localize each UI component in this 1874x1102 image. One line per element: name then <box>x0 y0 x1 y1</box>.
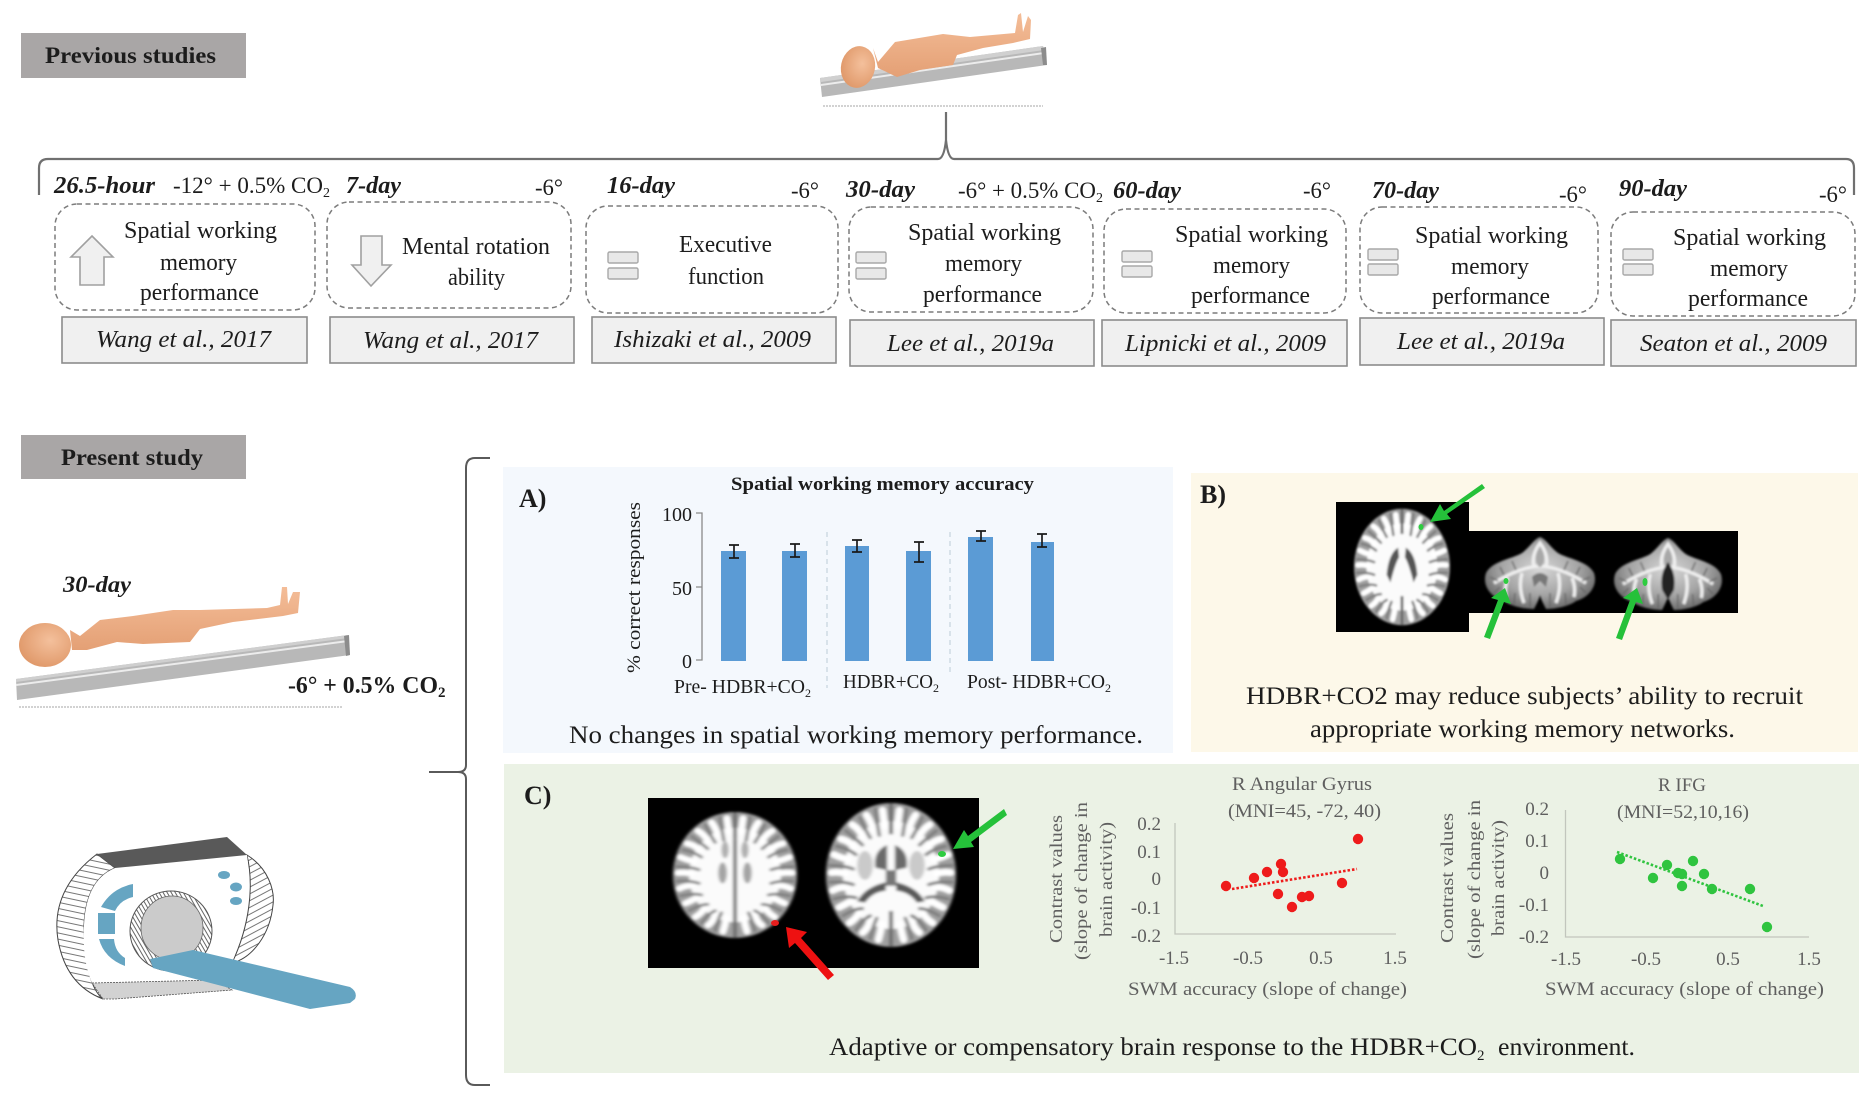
label: tilt and CO2 condition: 2 <box>438 685 446 701</box>
scatter plot: R IFG: 0.1 <box>1525 831 1549 852</box>
study 1: 26.5-hour: 2 <box>323 186 330 201</box>
study 7: 90-day: Spatial working <box>1673 225 1826 251</box>
label: tilt and CO2 condition: -6° + 0.5% CO <box>288 673 438 699</box>
scatter plot: R Angular Gyrus: 0.5 <box>1309 948 1333 969</box>
bar chart: accuracy: Post- HDBR+CO <box>967 671 1105 693</box>
study 5: 60-day: Spatial working <box>1175 222 1328 248</box>
caption: adaptive response: 2 <box>1477 1048 1484 1064</box>
bar chart: accuracy: 50 <box>672 578 692 600</box>
panel A: spatial working memory accuracy: A) <box>519 484 546 513</box>
study 1: 26.5-hour: Spatial working <box>124 218 277 244</box>
bar chart: accuracy: % correct responses <box>624 502 645 673</box>
study 6: 70-day: memory <box>1451 254 1529 280</box>
study 4: 30-day: Lee et al., 2019a <box>886 331 1054 357</box>
study 5: 60-day: memory <box>1213 253 1290 279</box>
arrow: green pointing to second cerebellum cluster <box>1616 588 1643 640</box>
panel B: reduced recruitment of networks: B) <box>1200 480 1226 509</box>
scatter plot: R Angular Gyrus <box>1046 774 1407 1000</box>
bar chart: accuracy: 2 <box>1105 681 1111 695</box>
caption: adaptive response <box>829 1034 1635 1064</box>
scatter plot: R Angular Gyrus: 1.5 <box>1383 948 1407 969</box>
study 6: 70-day: Lee et al., 2019a <box>1396 329 1565 355</box>
study 7: 90-day <box>1611 176 1856 366</box>
scatter plot: R IFG: SWM accuracy (slope of change) <box>1545 979 1824 1000</box>
bracket: previous studies timeline <box>39 112 1854 195</box>
study 5: 60-day <box>1102 178 1347 366</box>
arrow: green pointing to IFG <box>953 809 1007 849</box>
study 1: 26.5-hour: memory <box>160 250 237 276</box>
study 2: 7-day: 7-day <box>346 173 401 199</box>
bar chart: accuracy <box>624 502 1111 700</box>
bar chart: accuracy: 0 <box>682 651 692 673</box>
scatter plot: R IFG: R IFG <box>1658 775 1706 796</box>
scatter plot: R Angular Gyrus: Contrast values <box>1046 815 1066 943</box>
study 3: 16-day: -6° <box>791 178 819 203</box>
study 2: 7-day: Mental rotation <box>402 234 550 260</box>
study 7: 90-day: Seaton et al., 2009 <box>1640 331 1827 357</box>
bar chart: accuracy: 2 <box>933 681 939 695</box>
scatter plot: R IFG: 1.5 <box>1797 949 1821 970</box>
scatter plot: R Angular Gyrus: (MNI=45, -72, 40) <box>1228 801 1381 822</box>
study 1: 26.5-hour: performance <box>140 280 259 306</box>
caption: adaptive response: environment. <box>1498 1034 1635 1061</box>
scatter plot: R Angular Gyrus: -0.1 <box>1131 898 1161 919</box>
panel B: reduced recruitment of networks: appropriate working memory networks. <box>1310 716 1735 743</box>
study 4: 30-day: 2 <box>1096 191 1103 206</box>
study 2: 7-day: Wang et al., 2017 <box>363 328 539 354</box>
study 7: 90-day: memory <box>1710 256 1788 282</box>
panel B: reduced recruitment of networks: HDBR+CO2 may reduce subjects’ ability to recruit <box>1246 683 1803 710</box>
study 6: 70-day: -6° <box>1559 182 1587 207</box>
brace: present study to results <box>429 458 490 1085</box>
scatter plot: R Angular Gyrus: brain activity) <box>1096 822 1117 937</box>
study 4: 30-day: Spatial working <box>908 220 1061 246</box>
scatter plot: R Angular Gyrus: -0.5 <box>1233 948 1263 969</box>
study 1: 26.5-hour: -12° + 0.5% CO <box>173 173 323 198</box>
heading: previous studies <box>21 33 246 78</box>
study 3: 16-day: function <box>688 264 764 290</box>
scatter plot: R IFG: -0.5 <box>1631 949 1661 970</box>
study 5: 60-day: 60-day <box>1113 178 1181 204</box>
brain images with green markers <box>1336 502 1738 632</box>
study 5: 60-day: -6° <box>1303 178 1331 203</box>
panel A: spatial working memory accuracy: No changes in spatial working memory performance. <box>569 722 1143 749</box>
scatter plot: R IFG: -0.2 <box>1519 927 1549 948</box>
study 3: 16-day <box>586 173 838 363</box>
study 2: 7-day <box>327 173 574 363</box>
study 4: 30-day: 30-day <box>845 177 915 203</box>
heading: previous studies: Previous studies <box>45 43 216 68</box>
illustration: tilted subject on bed (top) <box>820 13 1047 106</box>
study 1: 26.5-hour: Wang et al., 2017 <box>96 327 272 353</box>
scatter plot: R IFG: 0 <box>1540 863 1549 884</box>
scatter plot: R Angular Gyrus: -1.5 <box>1159 948 1189 969</box>
bar chart: accuracy: 100 <box>662 504 692 526</box>
panel A: spatial working memory accuracy: Spatial working memory accuracy <box>731 474 1035 495</box>
heading: present study <box>21 435 246 479</box>
panel A: spatial working memory accuracy <box>503 467 1173 753</box>
scatter plot: R IFG: -0.1 <box>1519 895 1549 916</box>
arrow: green pointing to cerebellum cluster <box>1484 588 1511 639</box>
study 3: 16-day: Ishizaki et al., 2009 <box>613 327 811 353</box>
study 7: 90-day: -6° <box>1819 182 1847 207</box>
scatter plot: R Angular Gyrus: 0.1 <box>1137 842 1161 863</box>
heading: present study: Present study <box>61 445 204 470</box>
panel C: adaptive or compensatory response <box>504 764 1859 1073</box>
scatter plot: R Angular Gyrus: 0.2 <box>1137 814 1161 835</box>
scatter plot: R Angular Gyrus: -0.2 <box>1131 926 1161 947</box>
scatter plot: R IFG: brain activity) <box>1488 820 1509 936</box>
scatter plot: R IFG: Contrast values <box>1437 813 1457 943</box>
study 2: 7-day: -6° <box>535 175 563 200</box>
study 2: 7-day: ability <box>448 265 505 291</box>
study 4: 30-day: performance <box>923 282 1042 308</box>
label: 30-day: 30-day <box>62 572 132 597</box>
scatter plot: R IFG: -1.5 <box>1551 949 1581 970</box>
illustration: MRI scanner <box>57 837 356 1009</box>
scatter plot: R Angular Gyrus: R Angular Gyrus <box>1232 774 1372 795</box>
study 7: 90-day: 90-day <box>1619 176 1687 202</box>
study 1: 26.5-hour: 26.5-hour <box>53 173 156 199</box>
scatter plot: R Angular Gyrus: (slope of change in <box>1071 802 1092 960</box>
bar chart: accuracy: Pre- HDBR+CO <box>674 676 805 698</box>
study 6: 70-day: 70-day <box>1372 178 1439 204</box>
study 3: 16-day: 16-day <box>607 173 675 199</box>
study 1: 26.5-hour <box>53 173 330 363</box>
scatter plot: R IFG: (MNI=52,10,16) <box>1617 802 1749 823</box>
brain images with red and green markers <box>648 798 979 968</box>
arrow: red pointing to angular gyrus <box>786 927 834 980</box>
scatter plot: R IFG: 0.2 <box>1525 799 1549 820</box>
panel C: adaptive or compensatory response: C) <box>524 781 551 810</box>
study 4: 30-day: memory <box>945 251 1022 277</box>
study 4: 30-day: -6° + 0.5% CO <box>958 178 1096 203</box>
scatter plot: R IFG: (slope of change in <box>1464 800 1485 959</box>
study 6: 70-day <box>1360 178 1604 365</box>
study 5: 60-day: performance <box>1191 283 1310 309</box>
scatter plot: R IFG <box>1437 775 1824 1000</box>
bar chart: accuracy: HDBR+CO <box>843 671 933 693</box>
scatter plot: R Angular Gyrus: 0 <box>1152 869 1161 890</box>
study 5: 60-day: Lipnicki et al., 2009 <box>1124 331 1326 357</box>
caption: adaptive response: Adaptive or compensatory brain response to the HDBR+CO <box>829 1034 1477 1061</box>
study 7: 90-day: performance <box>1688 286 1808 312</box>
panel B: reduced recruitment of networks <box>1191 473 1858 752</box>
study 6: 70-day: performance <box>1432 284 1550 310</box>
arrow: green pointing to axial cluster <box>1430 484 1485 522</box>
bar chart: accuracy: 2 <box>805 686 811 700</box>
study 6: 70-day: Spatial working <box>1415 223 1568 249</box>
study 3: 16-day: Executive <box>679 232 772 258</box>
scatter plot: R Angular Gyrus: SWM accuracy (slope of change) <box>1128 979 1407 1000</box>
illustration: tilted subject on bed (present study) <box>16 587 350 707</box>
scatter plot: R IFG: 0.5 <box>1716 949 1740 970</box>
study 4: 30-day <box>845 177 1103 366</box>
